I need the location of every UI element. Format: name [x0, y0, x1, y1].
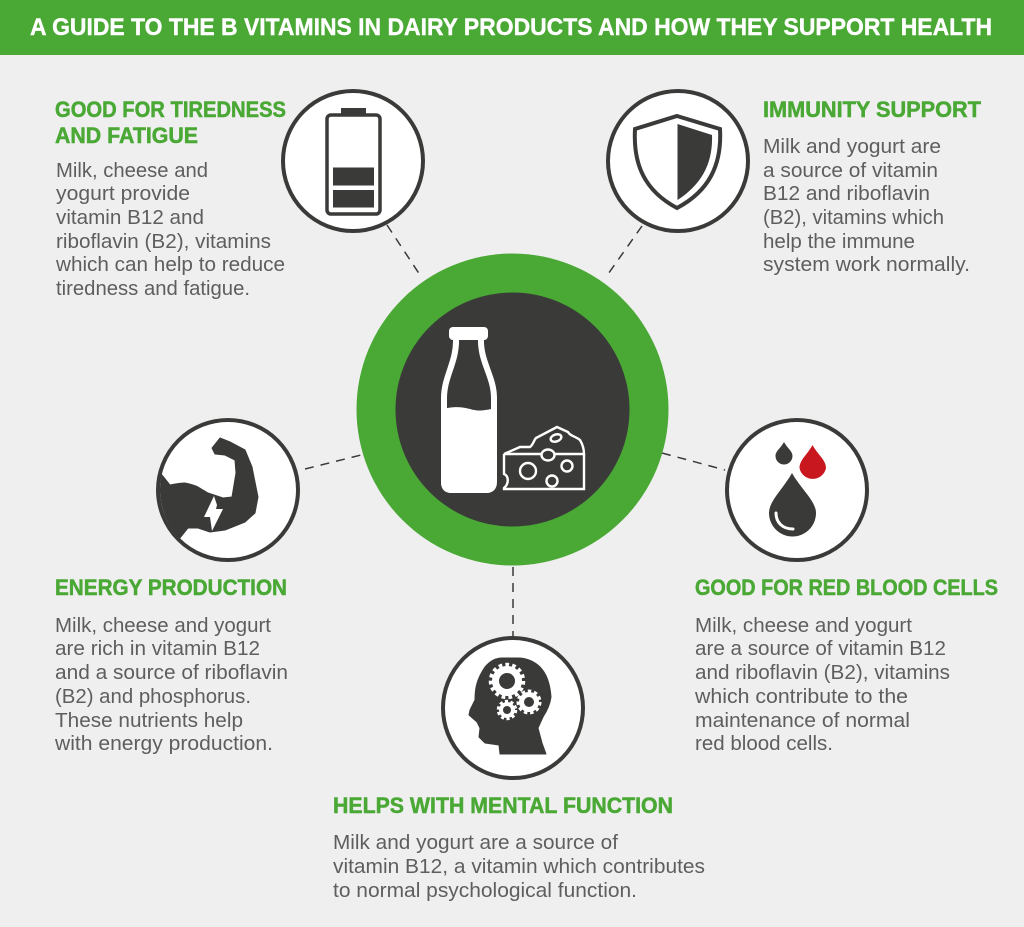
- text block: energy production: with energy production.: [54, 732, 273, 755]
- icon: milk bottle: [441, 327, 496, 493]
- text block: tiredness and fatigue: [55, 97, 286, 300]
- dashed connector: red blood cells: [662, 453, 725, 470]
- text block: tiredness and fatigue: Milk, cheese and: [56, 159, 208, 182]
- dashed connector: energy: [305, 454, 365, 469]
- text block: red blood cells: Milk, cheese and yogurt: [695, 614, 912, 637]
- text block: energy production: These nutrients help: [55, 709, 243, 732]
- dashed connector: tiredness: [387, 225, 420, 275]
- text block: red blood cells: red blood cells.: [695, 732, 833, 755]
- text block: red blood cells: are a source of vitamin B12: [695, 637, 946, 660]
- text block: red blood cells: and riboflavin (B2), vitamins: [695, 661, 950, 684]
- text block: tiredness and fatigue: AND FATIGUE: [55, 123, 198, 148]
- text block: immunity support: Milk and yogurt are: [763, 135, 941, 158]
- text block: tiredness and fatigue: vitamin B12 and: [56, 206, 204, 229]
- text block: immunity support: help the immune: [763, 230, 915, 253]
- icon: cheese: [504, 427, 584, 489]
- icon: blood drops: [727, 420, 867, 560]
- dashed connector: immunity: [606, 226, 642, 277]
- dashed connector: mental function: [512, 567, 514, 637]
- text block: energy production: are rich in vitamin B12: [55, 637, 260, 660]
- text block: red blood cells: [694, 575, 998, 755]
- text block: immunity support: a source of vitamin: [763, 159, 938, 182]
- text block: red blood cells: which contribute to the: [694, 685, 908, 708]
- title banner: [0, 0, 1024, 55]
- text block: energy production: and a source of riboflavin: [55, 661, 288, 684]
- text block: mental function: vitamin B12, a vitamin which contributes: [333, 855, 705, 878]
- text block: tiredness and fatigue: which can help to reduce: [55, 253, 285, 276]
- text block: tiredness and fatigue: yogurt provide: [56, 182, 190, 205]
- text block: immunity support: system work normally.: [763, 253, 970, 276]
- text block: immunity support: [763, 97, 982, 276]
- text block: red blood cells: maintenance of normal: [695, 709, 910, 732]
- text block: energy production: [54, 575, 288, 755]
- text block: mental function: HELPS WITH MENTAL FUNCTION: [333, 793, 673, 818]
- title banner: A GUIDE TO THE B VITAMINS IN DAIRY PRODUCTS AND HOW THEY SUPPORT HEALTH: [30, 14, 992, 41]
- text block: mental function: [333, 793, 705, 902]
- icon: head with gears: [443, 638, 583, 778]
- text block: mental function: to normal psychological function.: [333, 879, 637, 902]
- text block: immunity support: B12 and riboflavin: [763, 182, 930, 205]
- text block: energy production: Milk, cheese and yogurt: [55, 614, 271, 637]
- icon: shield: [608, 91, 748, 231]
- icon: battery: [283, 91, 423, 231]
- text block: tiredness and fatigue: tiredness and fatigue.: [56, 277, 250, 300]
- gears: [491, 665, 540, 718]
- text block: immunity support: (B2), vitamins which: [763, 206, 944, 229]
- text block: mental function: Milk and yogurt are a source of: [333, 831, 618, 854]
- text block: tiredness and fatigue: GOOD FOR TIREDNESS: [55, 97, 286, 122]
- text block: energy production: ENERGY PRODUCTION: [55, 575, 287, 600]
- central dairy icon: [356, 254, 668, 566]
- text block: red blood cells: GOOD FOR RED BLOOD CELLS: [695, 575, 998, 600]
- text block: tiredness and fatigue: riboflavin (B2), vitamins: [56, 230, 271, 253]
- text block: energy production: (B2) and phosphorus.: [55, 685, 251, 708]
- text block: immunity support: IMMUNITY SUPPORT: [763, 97, 982, 122]
- icon: flexed arm with lightning bolt: [158, 420, 298, 560]
